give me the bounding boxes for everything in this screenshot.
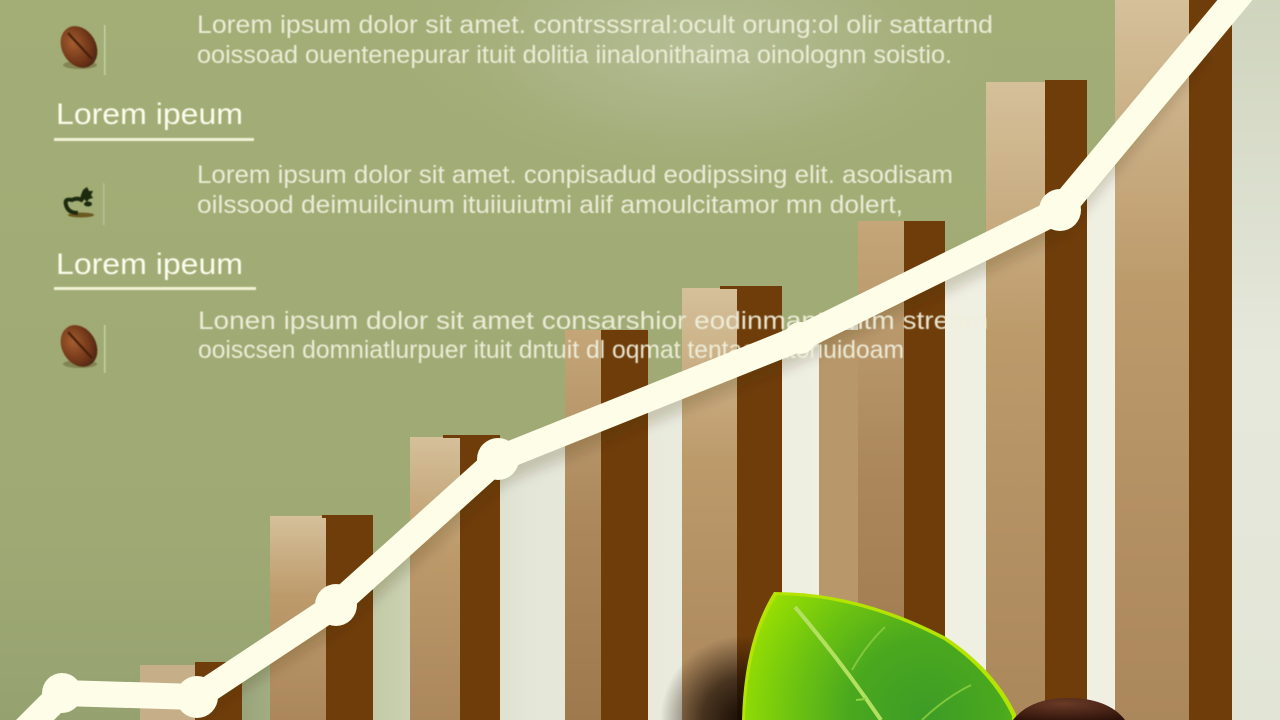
bar 3 <box>410 435 500 720</box>
text block 3: ooiscsen domniatlurpuer ituit dntuit dl oqmat tentaca atoriuidoam <box>198 336 904 364</box>
text block 2: oilssood deimuilcinum ituiiuiutmi alif amoulcitamor mn dolert, <box>197 191 903 219</box>
bar 7 <box>986 80 1087 720</box>
text block 3 <box>53 307 988 374</box>
leaf shadow <box>655 630 755 720</box>
bar 2 <box>270 515 373 720</box>
bar 6 <box>819 221 945 720</box>
text block 2: Lorem ipsum dolor sit amet. conpisadud eodipssing elit. asodisam <box>197 161 953 189</box>
text block 3: Lonen ipsum dolor sit amet consarshior eodinmantgmtm stream <box>198 307 988 335</box>
text block 1: Lorem ipsum dolor sit amet. contrsssrral:ocult orung:ol olir sattartnd <box>197 11 993 39</box>
icon: coffee bean <box>53 19 106 75</box>
icon: coffee bean <box>53 318 106 374</box>
text block 1: ooissoad ouentenepurar ituit dolitia iinalonithaima oinolognn soistio. <box>197 41 952 69</box>
bar 5 <box>682 286 782 720</box>
icon: large coffee bean <box>1013 698 1125 720</box>
bar 4 <box>565 330 648 720</box>
text block 2 <box>66 161 953 225</box>
heading 2: Lorem ipeum <box>56 248 243 281</box>
bar 1 <box>140 662 242 720</box>
trend line shadow <box>197 50 1200 705</box>
heading 1 <box>54 98 254 141</box>
icon: plant <box>66 183 104 225</box>
heading 2 <box>54 248 256 290</box>
icon: green leaf <box>742 592 1016 720</box>
text block 1 <box>53 11 993 75</box>
heading 1: Lorem ipeum <box>56 98 243 131</box>
bar 8 <box>1115 0 1232 720</box>
